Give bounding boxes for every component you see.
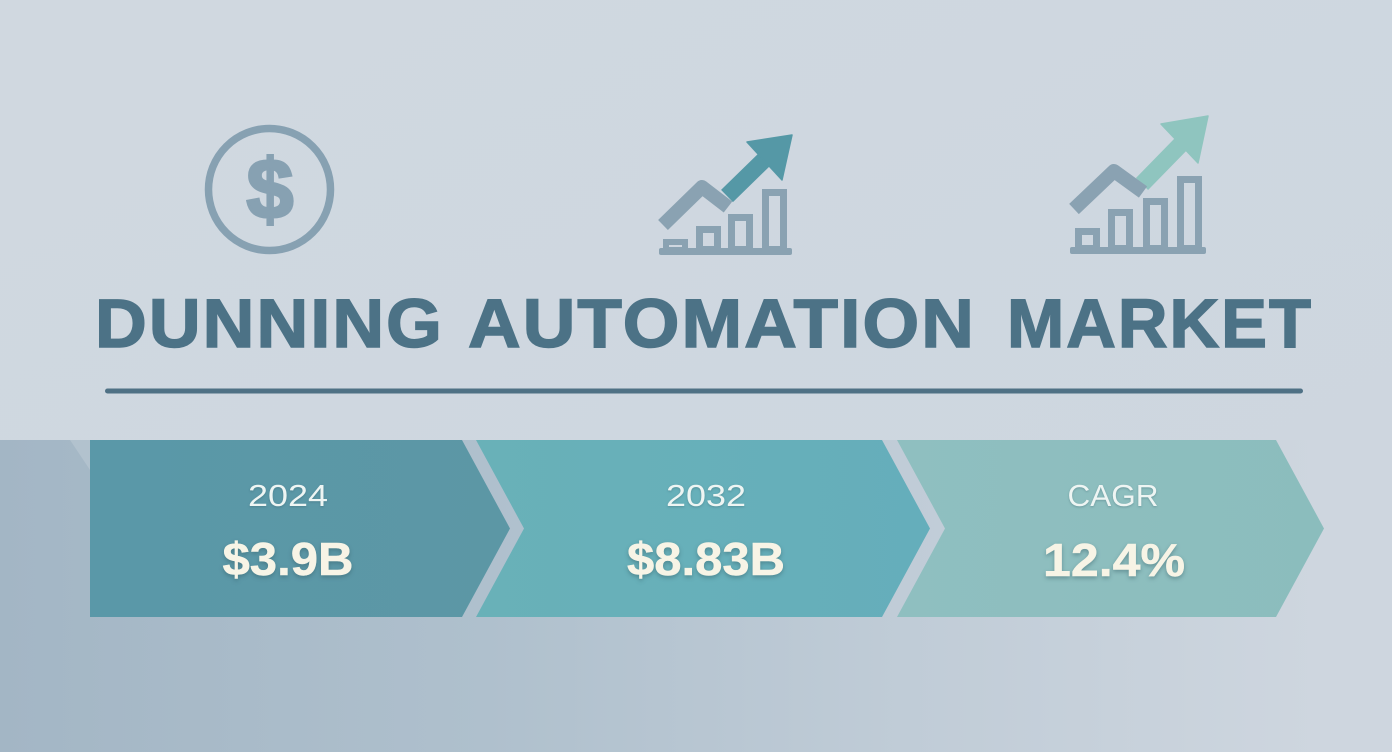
icon: dollar coin	[208, 128, 330, 250]
light corner wedge	[70, 440, 90, 470]
label: 2032: 2032	[666, 478, 746, 513]
value: $8.83B: $8.83B	[627, 533, 785, 585]
panel: CAGR chevron	[897, 440, 1324, 617]
title: DUNNING	[95, 285, 444, 362]
lower shaded band	[0, 440, 1392, 752]
panel: 2032 chevron	[476, 440, 930, 617]
icon: growth chart with mint arrow	[1070, 116, 1208, 254]
label: CAGR: CAGR	[1068, 478, 1158, 513]
panel: 2024 chevron	[90, 440, 510, 617]
title: AUTOMATION	[468, 285, 976, 362]
label: 2024: 2024	[248, 478, 328, 513]
icon: growth chart with teal arrow	[659, 135, 792, 255]
value: 12.4%: 12.4%	[1043, 534, 1185, 586]
title: MARKET	[1007, 285, 1313, 362]
title underline	[105, 388, 1303, 394]
icon: dollar coin: $	[247, 142, 293, 236]
value: $3.9B: $3.9B	[222, 533, 354, 585]
title	[95, 285, 1313, 362]
